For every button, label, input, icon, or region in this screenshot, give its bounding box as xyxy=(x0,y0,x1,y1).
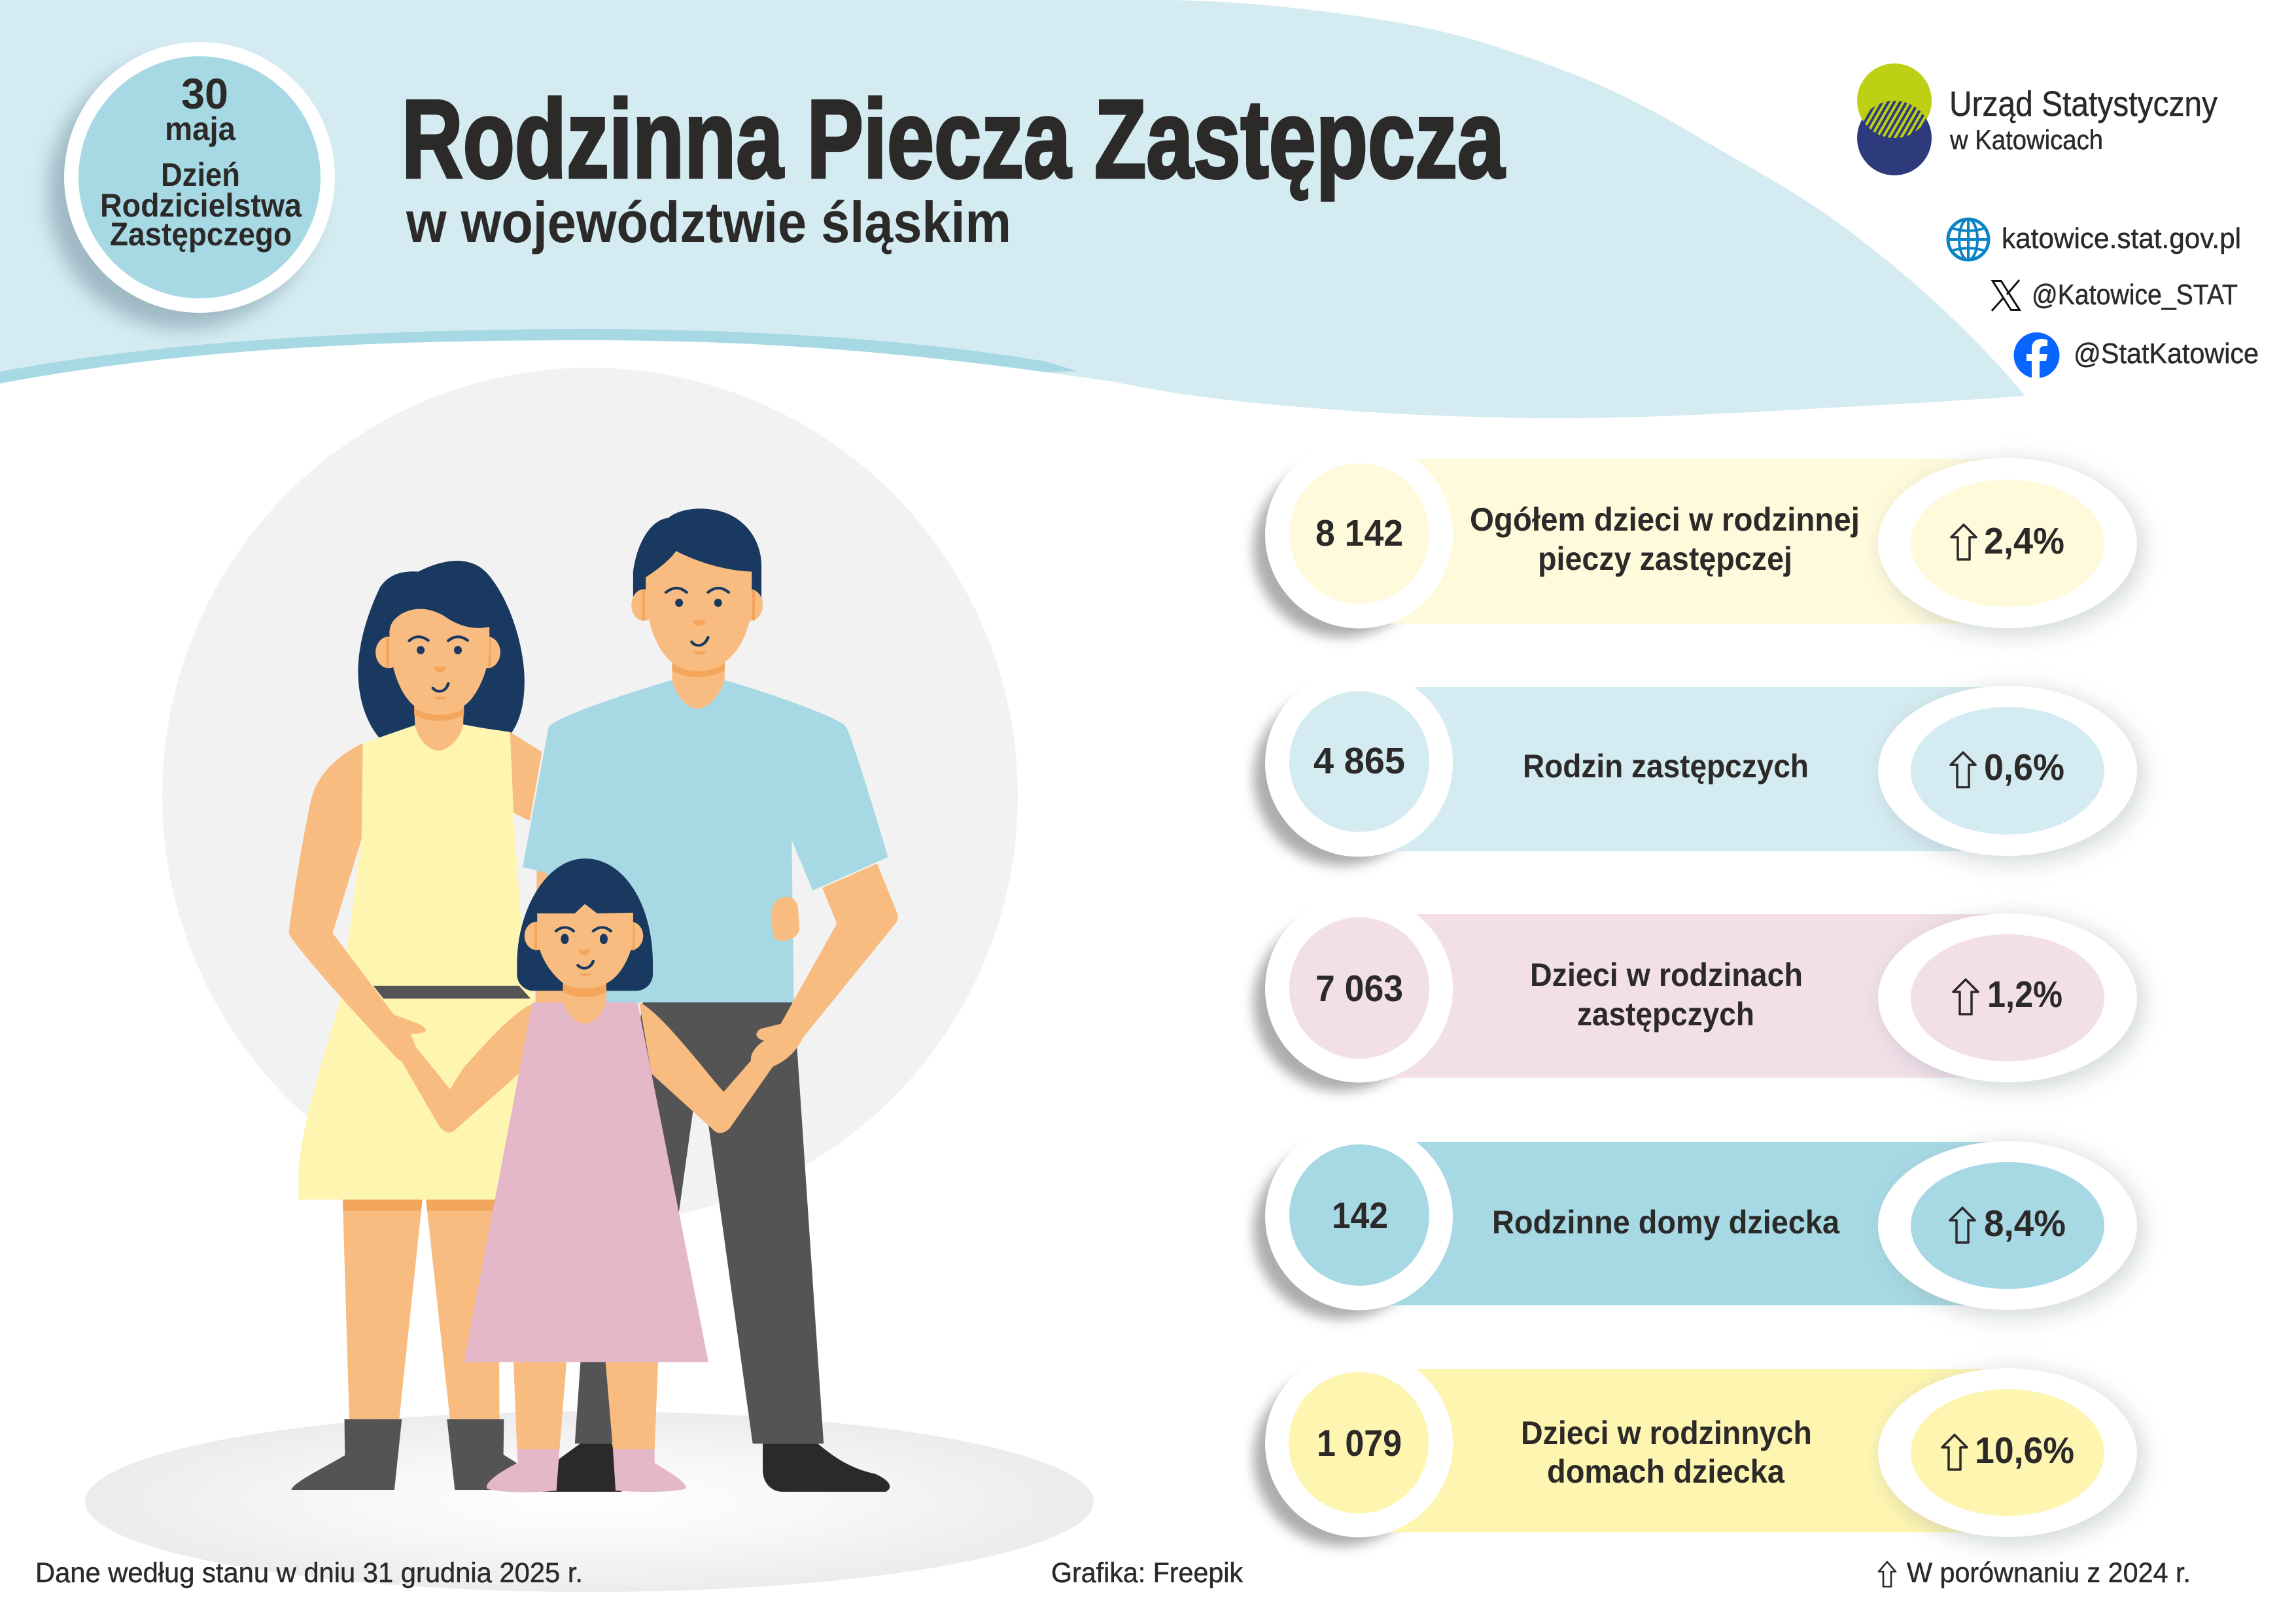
date badge xyxy=(48,42,335,329)
value: 142 xyxy=(1332,1195,1388,1237)
value: 1 079 xyxy=(1317,1422,1402,1464)
label: Dzieci w rodzinach xyxy=(1530,957,1803,993)
arrow xyxy=(1942,1435,1967,1470)
label line 2: domach dziecka xyxy=(1547,1453,1785,1490)
father head xyxy=(631,508,763,709)
panel: row 2 foster families xyxy=(1253,669,2145,866)
label line 2: zastępczych xyxy=(1577,996,1754,1033)
change: 2,4% xyxy=(1984,520,2064,562)
header background band xyxy=(0,0,2025,418)
badge line: Zastępczego: Zastępczego xyxy=(110,216,292,253)
arrow xyxy=(1950,1208,1975,1243)
badge line: Rodzicielstwa: Rodzicielstwa xyxy=(100,187,302,224)
website: katowice.stat.gov.pl xyxy=(2002,222,2241,255)
logo city: w Katowicach xyxy=(1949,124,2103,155)
illustration: family xyxy=(289,508,898,1492)
value: 8 142 xyxy=(1315,512,1403,554)
logo name: Urząd Statystyczny xyxy=(1949,84,2218,124)
label line 2: pieczy zastępczej xyxy=(1538,540,1792,577)
footer: comparison note: W porównaniu z 2024 r. xyxy=(1907,1557,2191,1589)
subtitle: w województwie śląskim xyxy=(406,190,1011,255)
change: 10,6% xyxy=(1975,1430,2074,1472)
value: 7 063 xyxy=(1315,968,1403,1010)
mother head xyxy=(375,609,500,750)
arrow xyxy=(1951,525,1976,559)
icon: Facebook xyxy=(2013,332,2059,378)
panel: row 4 family children's homes xyxy=(1253,1123,2145,1319)
X handle: @Katowice_STAT xyxy=(2032,279,2238,311)
value: 4 865 xyxy=(1313,740,1405,782)
change: 8,4% xyxy=(1984,1203,2066,1244)
floor ellipse xyxy=(85,1411,1094,1592)
label: Ogółem dzieci w rodzinnej xyxy=(1470,501,1860,538)
icon: globe xyxy=(1948,219,1989,260)
footer: data date: Dane według stanu w dniu 31 grudnia 2025 r. xyxy=(35,1557,583,1589)
Facebook handle: @StatKatowice xyxy=(2074,338,2259,370)
header accent wave xyxy=(0,329,1077,383)
father xyxy=(523,680,898,1492)
child head xyxy=(517,858,653,1024)
icon: X xyxy=(1991,280,2021,311)
arrow xyxy=(1951,752,1975,787)
badge month: maja xyxy=(165,111,236,147)
panel: row 1 total children xyxy=(1253,441,2145,637)
mother arm and child arm xyxy=(289,743,536,1133)
change: 1,2% xyxy=(1987,974,2062,1015)
arrow xyxy=(1953,980,1978,1014)
label: Dzieci w rodzinnych xyxy=(1521,1415,1812,1451)
badge line: Dzień: Dzień xyxy=(161,156,240,193)
footer: arrow xyxy=(1879,1562,1896,1587)
badge date number: 30 xyxy=(181,69,228,118)
child body xyxy=(464,1002,708,1492)
footer: credit: Grafika: Freepik xyxy=(1051,1557,1243,1589)
change: 0,6% xyxy=(1984,747,2064,788)
title: Rodzinna Piecza Zastępcza xyxy=(402,77,1505,202)
panel: row 5 children in family homes xyxy=(1253,1349,2145,1546)
panel: row 3 children in foster families xyxy=(1253,895,2145,1091)
label: Rodzin zastępczych xyxy=(1523,748,1809,785)
mother xyxy=(292,561,542,1490)
background circle behind family xyxy=(162,368,1018,1224)
label: Rodzinne domy dziecka xyxy=(1492,1204,1840,1241)
logo: Urząd Statystyczny xyxy=(1857,63,2218,175)
